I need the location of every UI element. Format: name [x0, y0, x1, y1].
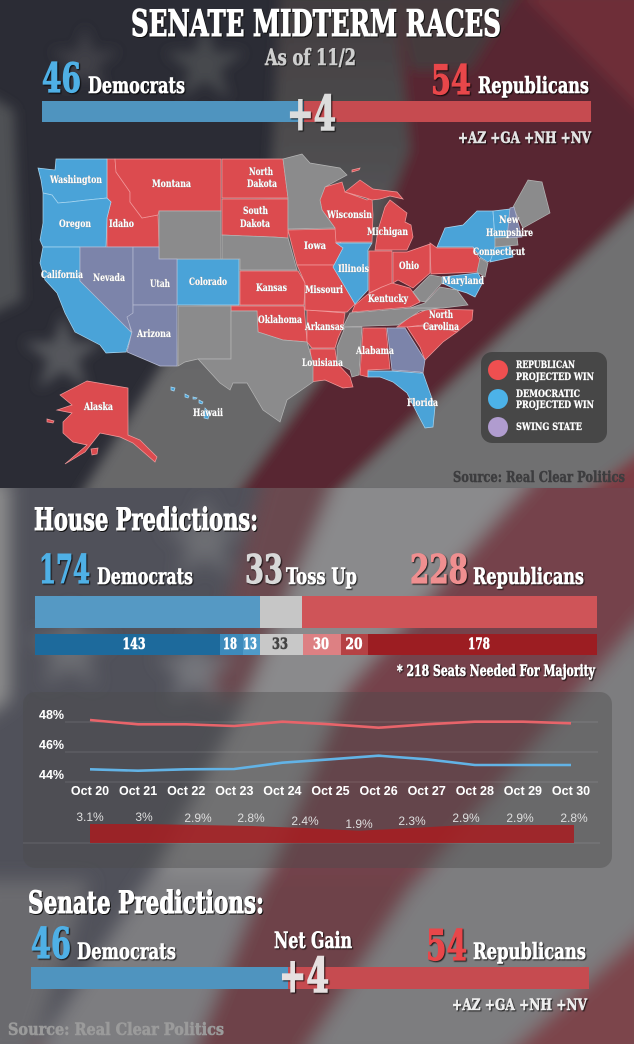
- state labels: Arkansas: [304, 322, 344, 333]
- house predictions heading: House Predictions:: [34, 502, 258, 538]
- map legend: SWING STATE: [516, 421, 582, 433]
- democratic poll line: [90, 756, 571, 771]
- date axis labels: [71, 784, 590, 798]
- map legend: [481, 352, 607, 443]
- house main bar: [35, 596, 597, 628]
- state labels: Missouri: [305, 285, 343, 296]
- state labels: Iowa: [304, 241, 326, 252]
- senate header: republicans count: 54: [431, 57, 471, 104]
- senate predictions: democrats: 46: [31, 919, 71, 968]
- house totals: toss up: Toss Up: [286, 564, 357, 590]
- republican states: [47, 159, 480, 464]
- state labels: Arizona: [136, 329, 171, 340]
- y axis labels: 44%: [39, 768, 64, 782]
- spread values: 2.8%: [237, 811, 265, 825]
- spread values: 2.8%: [560, 811, 588, 825]
- state labels: Alaska: [83, 402, 113, 413]
- house breakdown bar: 18: [223, 634, 237, 653]
- senate predictions bar: [31, 967, 589, 989]
- state labels: California: [41, 270, 83, 281]
- state labels: [41, 167, 533, 419]
- swing states: [80, 207, 522, 373]
- date axis labels: Oct 25: [311, 784, 350, 798]
- house breakdown bar: 30: [313, 634, 329, 653]
- senate header: democrats count: Democrats: [88, 73, 185, 99]
- y axis labels: [39, 708, 64, 782]
- flipped states list: +AZ +GA +NH +NV: [458, 128, 591, 147]
- y axis labels: 48%: [39, 708, 64, 722]
- polling chart panel: [23, 692, 612, 868]
- democratic states: [38, 159, 513, 428]
- house breakdown bar: 178: [468, 634, 490, 653]
- bottom source credit: Source: Real Clear Politics: [8, 1020, 224, 1040]
- date axis labels: Oct 24: [263, 784, 302, 798]
- spread values: 2.4%: [291, 814, 319, 828]
- spread values: 3%: [135, 810, 153, 824]
- state labels: Wisconsin: [326, 210, 373, 221]
- state labels: Alabama: [355, 346, 394, 357]
- senate header: democrats count: 46: [42, 55, 81, 102]
- date axis labels: Oct 22: [167, 784, 205, 798]
- state labels: Michigan: [367, 227, 409, 238]
- republican poll line: [90, 720, 571, 728]
- state labels: Kansas: [256, 283, 287, 294]
- spread values: 1.9%: [345, 817, 373, 831]
- state labels: Kentucky: [368, 294, 409, 305]
- senate predictions heading: Senate Predictions:: [28, 885, 264, 921]
- state labels: Idaho: [109, 219, 134, 230]
- date axis labels: Oct 30: [552, 784, 590, 798]
- y axis labels: 46%: [39, 738, 64, 752]
- house totals: democrats: [39, 547, 193, 593]
- senate predictions: democrats: Democrats: [77, 939, 176, 965]
- spread area: [90, 824, 574, 843]
- state labels: Dakota: [247, 179, 277, 190]
- state labels: Oklahoma: [258, 315, 302, 326]
- state labels: North: [249, 167, 274, 178]
- senate predictions: net gain label: Net Gain: [274, 928, 352, 954]
- net gain +4: +4: [287, 86, 336, 142]
- senate header: republicans count: [431, 57, 589, 104]
- senate predictions: republicans: [426, 921, 586, 970]
- senate predictions: republicans: 54: [426, 921, 467, 970]
- state labels: Montana: [152, 179, 191, 190]
- state labels: Florida: [407, 398, 438, 409]
- house totals: republicans: [410, 547, 584, 593]
- US map: [38, 154, 550, 464]
- state labels: North: [429, 310, 454, 321]
- house totals: democrats: Democrats: [97, 564, 193, 590]
- house breakdown bar: 13: [243, 634, 257, 653]
- state labels: Oregon: [59, 219, 92, 230]
- senate balance bar: [42, 101, 591, 122]
- senate predictions: democrats: [31, 919, 176, 968]
- subtitle: as of date: As of 11/2: [264, 45, 356, 71]
- map legend: DEMOCRATIC: [516, 388, 580, 400]
- senate header: republicans count: Republicans: [478, 73, 589, 99]
- date axis labels: Oct 23: [215, 784, 253, 798]
- house totals: toss up: [245, 547, 357, 593]
- spread values: 2.9%: [452, 811, 480, 825]
- state labels: Maryland: [442, 276, 484, 287]
- state labels: Utah: [150, 279, 171, 290]
- house totals: democrats: 174: [39, 547, 90, 593]
- date axis labels: Oct 26: [359, 784, 398, 798]
- state labels: Ohio: [399, 261, 419, 272]
- date axis labels: Oct 28: [456, 784, 494, 798]
- map legend: REPUBLICAN: [516, 359, 575, 371]
- spread values: [76, 810, 588, 831]
- senate header: democrats count: [42, 55, 185, 102]
- state labels: New: [499, 215, 519, 226]
- house breakdown bar: 20: [346, 634, 362, 653]
- state labels: Louisiana: [302, 358, 343, 369]
- state labels: South: [243, 206, 269, 217]
- house totals: republicans: Republicans: [473, 564, 584, 590]
- date axis labels: Oct 20: [71, 784, 109, 798]
- senate predictions flipped states: +AZ +GA +NH +NV: [452, 995, 587, 1014]
- spread values: 3.1%: [76, 810, 104, 824]
- state labels: Carolina: [423, 322, 459, 333]
- state labels: Washington: [49, 175, 103, 186]
- state labels: Illinois: [338, 264, 369, 275]
- date axis labels: Oct 29: [504, 784, 542, 798]
- senate predictions net gain +4: +4: [279, 948, 329, 1004]
- map legend: PROJECTED WIN: [516, 371, 594, 383]
- map legend: PROJECTED WIN: [516, 399, 594, 411]
- house totals: republicans: 228: [410, 547, 468, 593]
- state labels: Connecticut: [473, 247, 525, 258]
- state labels: Hampshire: [486, 228, 533, 239]
- house breakdown bar: 143: [122, 634, 146, 653]
- house breakdown bar: 33: [272, 634, 288, 653]
- states with no race: [159, 154, 550, 422]
- spread values: 2.3%: [398, 814, 426, 828]
- state labels: Hawaii: [193, 408, 223, 419]
- state labels: Dakota: [240, 219, 270, 230]
- date axis labels: Oct 27: [408, 784, 446, 798]
- spread values: 2.9%: [184, 811, 212, 825]
- state labels: Colorado: [189, 277, 227, 288]
- senate predictions: republicans: Republicans: [473, 939, 586, 965]
- house breakdown bar: [35, 634, 597, 655]
- state labels: Nevada: [93, 273, 125, 284]
- spread values: 2.9%: [506, 811, 534, 825]
- house totals: toss up: 33: [245, 547, 283, 593]
- date axis labels: Oct 21: [119, 784, 157, 798]
